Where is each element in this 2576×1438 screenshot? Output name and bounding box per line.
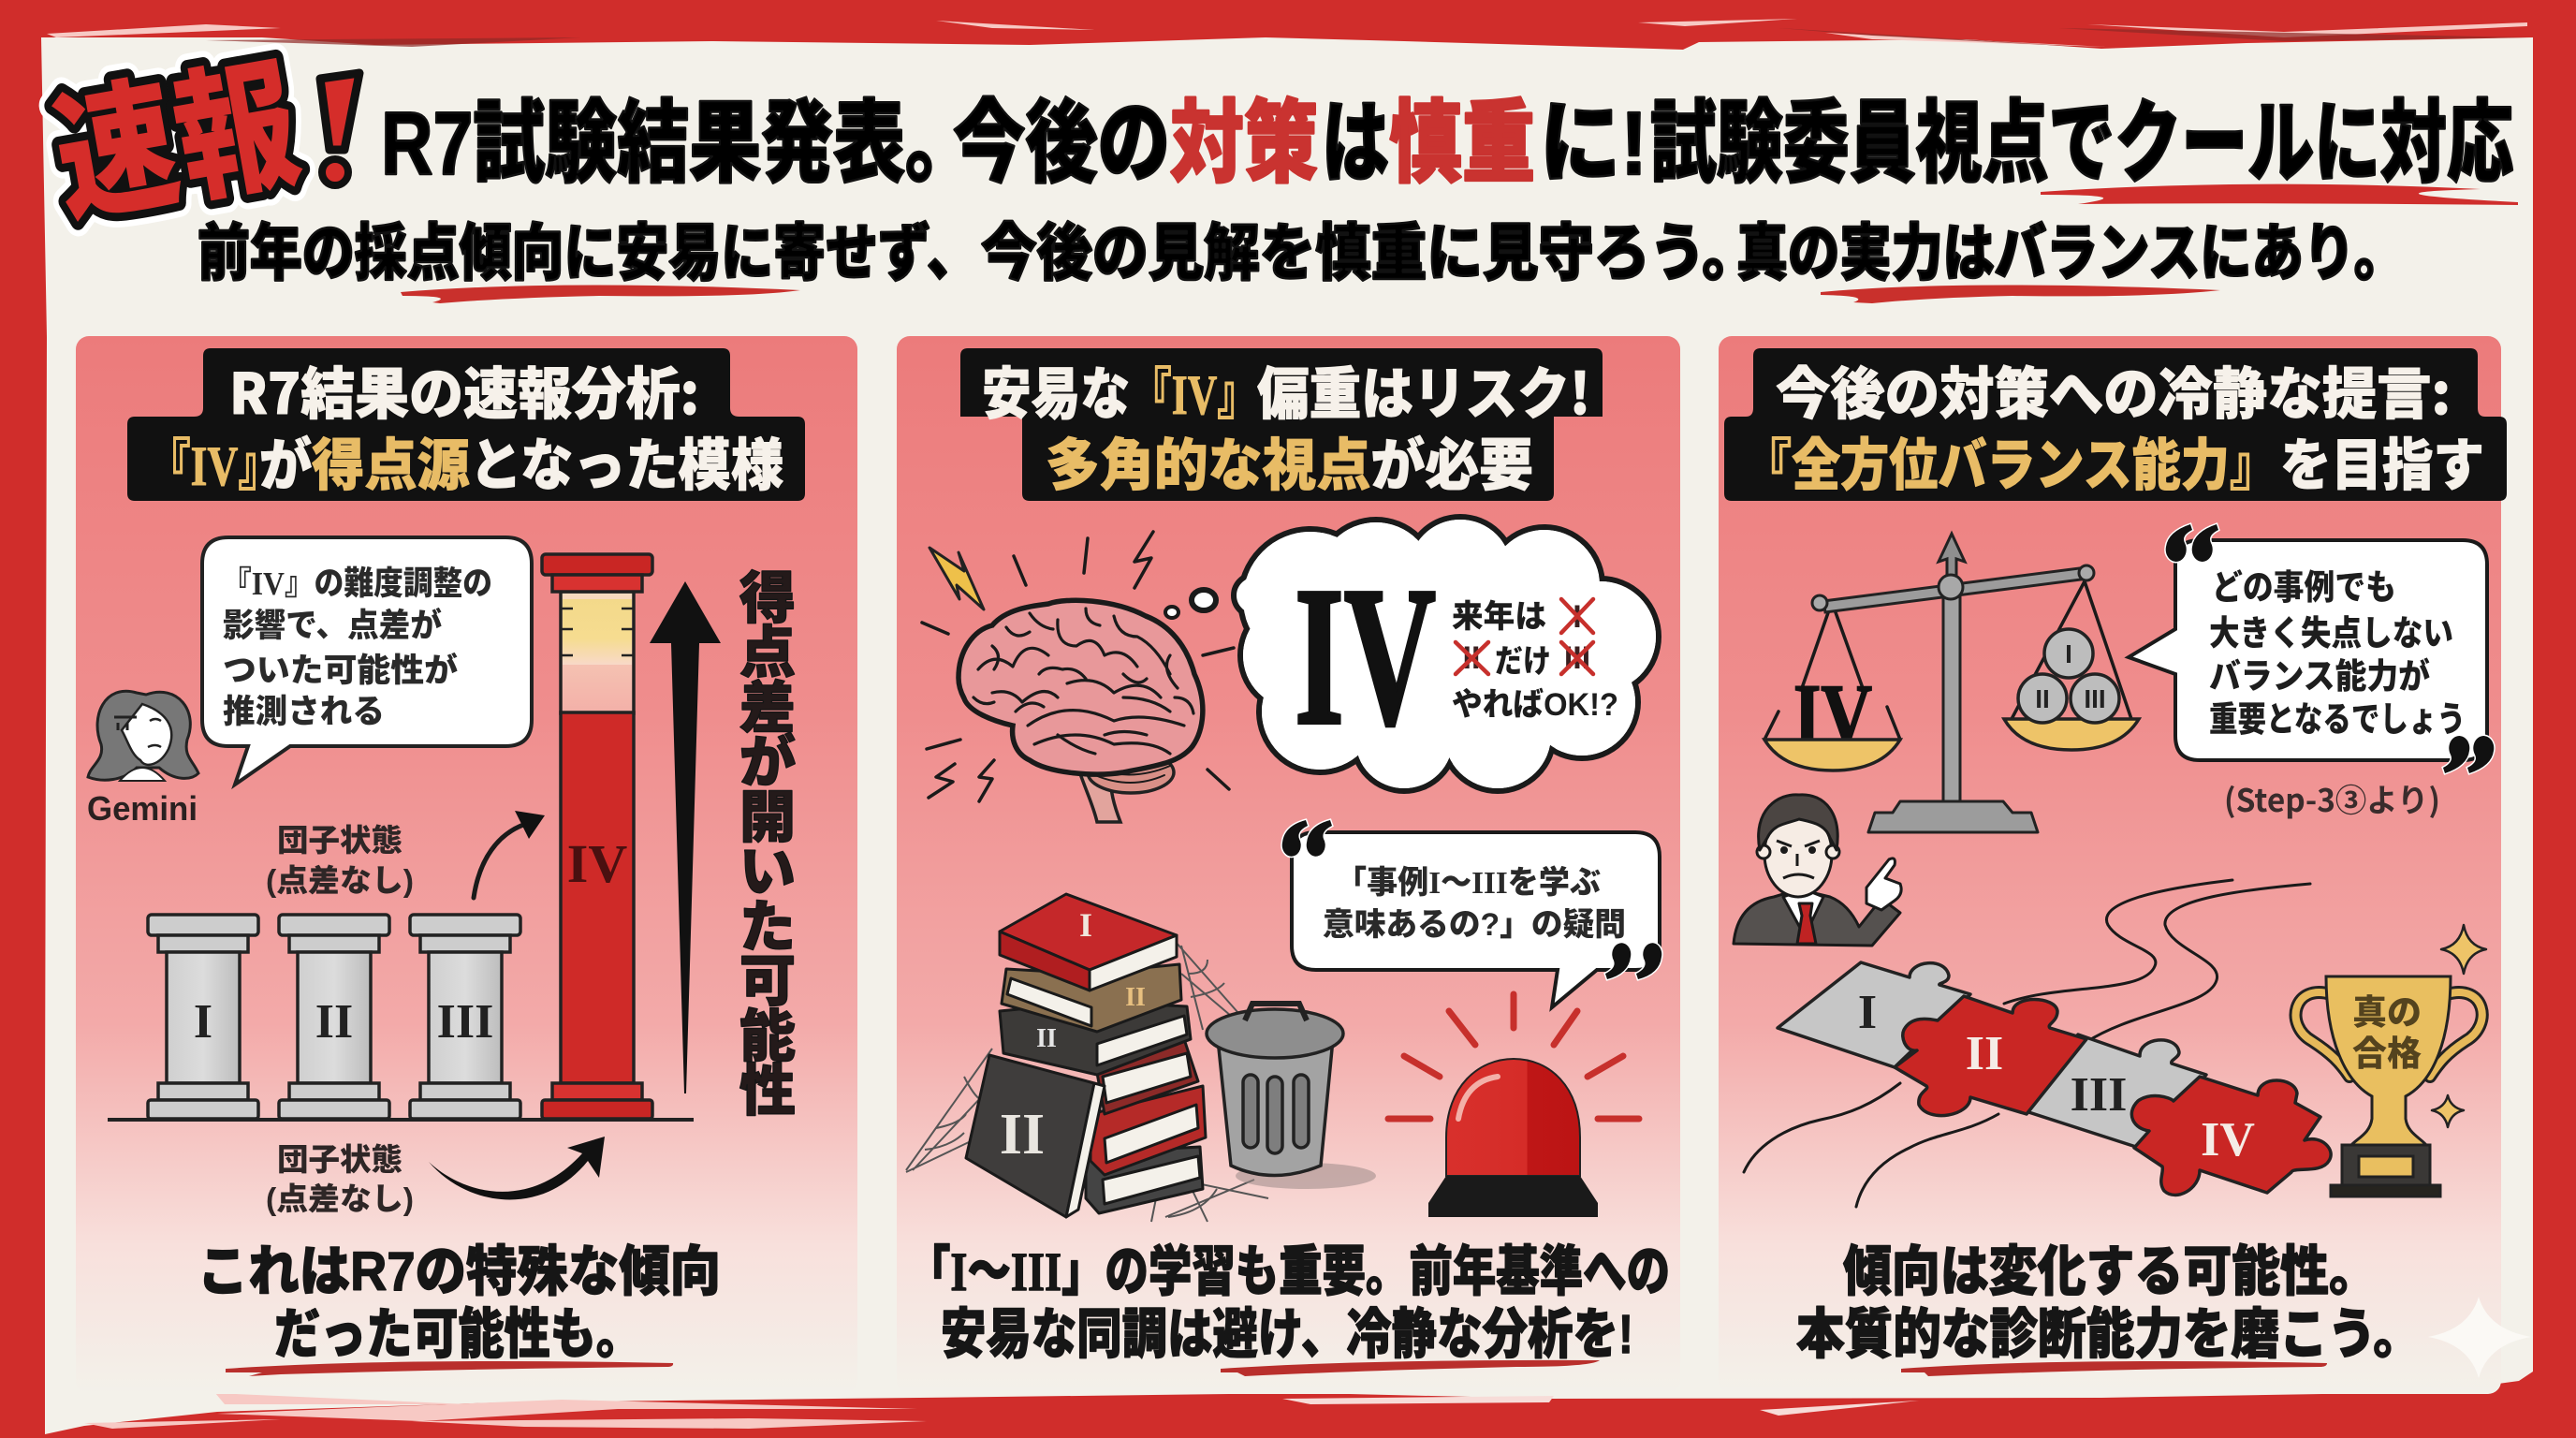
panel 2 heading <box>960 348 1603 502</box>
label: cluster lower: 団子状態 <box>277 1142 402 1177</box>
panel 1 conclusion: だった可能性も。 <box>274 1304 642 1365</box>
arrow: curved lower <box>429 1137 605 1199</box>
panel 2 heading: 多角的な視点が必要 <box>1046 420 1533 502</box>
panel 1: R7 result analysis <box>76 336 857 1394</box>
title headline: 対策 <box>1170 94 1318 194</box>
panel 2: risk of bias <box>897 336 1680 1394</box>
title burst: 速報! <box>37 7 359 253</box>
icon: book stack: I <box>1079 906 1092 944</box>
arrow: score gap up <box>650 581 721 1093</box>
puzzle piece I: I <box>1858 986 1877 1039</box>
puzzle piece I <box>1778 962 1970 1067</box>
subtitle <box>198 218 2406 287</box>
thought cloud <box>1165 517 1659 791</box>
panel 3 heading: 今後の対策への冷静な提言: <box>1776 349 2451 431</box>
panel 2 heading: 『IV』 <box>1131 349 1258 431</box>
speech bubble: balance: バランス能力が <box>2209 656 2430 696</box>
icon: examiner man <box>1734 795 1901 946</box>
thought cloud: 来年は <box>1452 599 1546 635</box>
winding road lines <box>1744 880 2310 1207</box>
speech bubble: Gemini comment <box>202 537 532 785</box>
subtitle underlines <box>401 285 2220 303</box>
title headline: に! <box>1540 94 1647 194</box>
source note: (Step-3③より) <box>2224 775 2440 821</box>
thought cloud: III <box>1564 640 1590 676</box>
icon: brain <box>959 600 1203 822</box>
title burst: 速報!: 速 <box>37 27 192 253</box>
icon: balance scale: I <box>2065 639 2072 668</box>
speech bubble: balance <box>2129 540 2487 760</box>
title headline: は <box>1322 94 1389 194</box>
panel 3 conclusion <box>1796 1241 2422 1365</box>
thought cloud: やればOK!? <box>1452 687 1618 723</box>
thought cloud: I <box>1573 599 1582 635</box>
icon: sparkles <box>2432 925 2486 1127</box>
panel 1 background <box>76 336 857 1394</box>
title headline: R7試験結果発表。 <box>381 94 977 194</box>
icon: Gemini avatar <box>88 691 198 781</box>
speech bubble: Gemini comment: ついた可能性が <box>223 652 458 689</box>
watermark: sparkle <box>2428 1297 2531 1378</box>
quote marks: doubt open <box>1282 820 1332 857</box>
title underline stroke <box>2041 184 2518 205</box>
icon: book stack: II <box>1125 983 1146 1012</box>
icon: book stack: II <box>1036 1024 1057 1053</box>
pillar IV tall red <box>542 554 652 1119</box>
panel 2 underline <box>1221 1360 1600 1376</box>
icon: balance scale: IV <box>1793 667 1872 762</box>
panel 3 heading: 『全方位バランス能力』 <box>1743 420 2278 502</box>
panel 2 conclusion: 安易な同調は避け、冷静な分析を! <box>941 1304 1633 1365</box>
panel 2 conclusion: 「I〜III」の学習も重要。前年基準への <box>907 1241 1670 1302</box>
icon: alarm siren <box>1388 994 1639 1217</box>
pillar IV tall red: IV <box>567 833 627 894</box>
label: cluster upper: 団子状態 <box>277 823 402 858</box>
title burst: 速報!: 報 <box>156 7 312 233</box>
panel 2 heading: 安易な <box>982 349 1130 431</box>
quote marks: balance close <box>2443 736 2494 773</box>
title burst: 速報!: 報 <box>156 7 312 233</box>
quote marks: balance open <box>2166 524 2218 562</box>
puzzle piece II <box>1895 996 2086 1116</box>
panel 1 conclusion <box>198 1241 721 1365</box>
panel 1 heading: 『IV』 <box>148 420 281 502</box>
icon: trophy: 合格 <box>2352 1034 2422 1073</box>
arrow: curved upper <box>474 811 545 898</box>
pillar III <box>410 915 520 1119</box>
icon: brain sparks <box>922 532 1234 801</box>
title headline: 慎重 <box>1389 94 1535 194</box>
label: cluster lower <box>266 1142 414 1216</box>
subtitle: 前年の採点傾向に安易に寄せず、 <box>198 218 979 287</box>
pillar II <box>279 915 389 1119</box>
thought cloud: だけ <box>1495 644 1551 680</box>
icon: balance scale: III <box>2084 684 2106 713</box>
panel 1 underline <box>226 1361 673 1376</box>
title headline: 今後の <box>953 94 1170 194</box>
speech bubble: balance: 重要となるでしょう <box>2209 700 2466 739</box>
speech bubble: doubt: 「事例I〜IIIを学ぶ <box>1336 865 1601 901</box>
panel 2 heading: 偏重はリスク! <box>1257 349 1590 431</box>
icon: trash can <box>1207 1004 1376 1189</box>
quote marks: doubt close <box>1605 943 1661 979</box>
icon: balance scale: II <box>2035 684 2050 713</box>
pillar I: I <box>194 995 212 1049</box>
icon: book stack: II <box>1000 1103 1045 1167</box>
pillar II: II <box>315 995 353 1049</box>
panel 3 underline <box>1901 1361 2327 1376</box>
puzzle piece III <box>2017 1034 2206 1148</box>
panel 3 background <box>1719 336 2501 1394</box>
puzzle piece IV <box>2131 1077 2331 1195</box>
panel 2 conclusion <box>907 1241 1670 1365</box>
vertical label: score gap: 得点差が開いた可能性 <box>739 553 796 1127</box>
icon: balance scale <box>1764 534 2139 832</box>
pillar I <box>148 915 258 1119</box>
ground line <box>108 1118 694 1122</box>
panel 1 heading: R7結果の速報分析: <box>229 349 699 431</box>
speech bubble: doubt <box>1292 832 1660 1007</box>
label: cluster upper <box>266 823 414 898</box>
puzzle piece III: III <box>2071 1068 2127 1122</box>
speech bubble: balance: 大きく失点しない <box>2209 614 2453 653</box>
panel 2 background <box>897 336 1680 1394</box>
panel 1 heading: が得点源となった模様 <box>259 420 783 502</box>
panel 3 conclusion: 傾向は変化する可能性。 <box>1843 1241 2378 1302</box>
subtitle: 今後の見解を慎重に見守ろう。 <box>981 218 1758 287</box>
title headline <box>381 94 2513 194</box>
speech bubble: balance: どの事例でも <box>2212 568 2396 607</box>
icon: trophy: 真の <box>2352 993 2422 1032</box>
speech bubble: Gemini comment: 『IV』の難度調整の <box>222 565 492 602</box>
panel 1 conclusion: これはR7の特殊な傾向 <box>198 1241 721 1302</box>
title burst: 速報!: 速 <box>37 27 192 253</box>
label: Gemini: Gemini <box>87 789 198 828</box>
puzzle piece II: II <box>1966 1027 2003 1080</box>
subtitle: 真の実力はバランスにあり。 <box>1736 218 2406 287</box>
puzzle piece IV: IV <box>2201 1113 2255 1167</box>
pillar III: III <box>437 995 493 1049</box>
speech bubble: Gemini comment: 影響で、点差が <box>223 607 442 644</box>
thought cloud: II <box>1463 640 1480 676</box>
thought cloud: IV <box>1295 546 1436 766</box>
icon: book stack <box>966 894 1206 1217</box>
panel 3 conclusion: 本質的な診断能力を磨こう。 <box>1796 1304 2422 1365</box>
panel 3 heading <box>1724 348 2507 502</box>
panel 1 heading <box>127 348 805 502</box>
panel 3: calm proposal <box>1719 336 2507 1394</box>
speech bubble: Gemini comment: 推測される <box>223 694 385 730</box>
cobwebs <box>906 941 1268 1222</box>
speech bubble: doubt: 意味あるの?」の疑問 <box>1323 907 1626 943</box>
panel 3 heading: を目指す <box>2280 420 2484 502</box>
label: cluster lower: (点差なし) <box>266 1181 414 1216</box>
icon: trophy <box>2296 976 2482 1196</box>
label: cluster upper: (点差なし) <box>266 863 414 898</box>
